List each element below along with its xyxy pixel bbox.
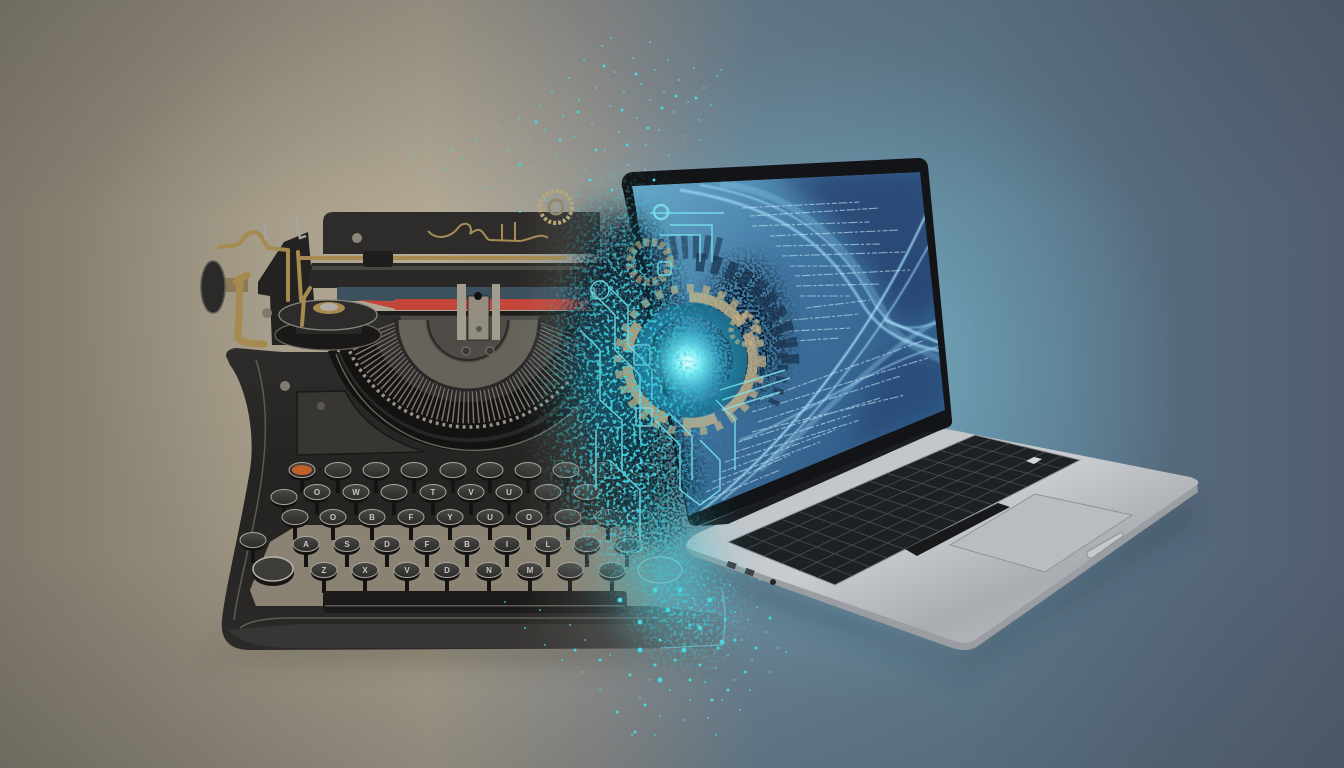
brass levers — [219, 232, 310, 344]
side panel — [297, 391, 425, 455]
laptop base top — [686, 429, 1198, 643]
key row 4: X — [362, 566, 368, 575]
laptop lid — [622, 158, 952, 526]
type bars — [372, 331, 564, 399]
keyboard — [728, 435, 1080, 585]
carriage frame — [258, 232, 314, 345]
key row 3: B — [464, 540, 470, 549]
hinge — [700, 431, 936, 526]
medium particles — [520, 66, 770, 732]
inner metal ring — [412, 320, 524, 376]
front notch — [1087, 533, 1123, 558]
key row 3: S — [344, 540, 350, 549]
outer dark data blocks — [650, 246, 790, 410]
key row 3: I — [506, 540, 508, 549]
laptop base side edge — [686, 482, 1198, 650]
key row 2: B — [369, 513, 375, 522]
circuit and gear core — [540, 191, 790, 540]
typewriter — [201, 212, 725, 650]
ornamental logo — [428, 222, 548, 241]
top plate — [323, 212, 600, 254]
space bar — [905, 503, 1010, 556]
key row 1: W — [352, 488, 360, 497]
core glow — [630, 304, 746, 420]
key row 2: O — [526, 513, 532, 522]
key row 3: L — [546, 540, 551, 549]
soft ground shadow — [210, 500, 1195, 670]
key row 4: Z — [322, 566, 327, 575]
key row 2: Y — [447, 513, 453, 522]
key row 0 — [289, 462, 616, 493]
flying particles — [412, 38, 786, 735]
type guide — [457, 284, 500, 340]
left knob — [201, 261, 248, 313]
dissolve dark speckle — [551, 206, 802, 562]
type bar tips — [347, 345, 590, 427]
circuit traces — [580, 205, 790, 540]
small particles — [412, 38, 786, 735]
ghost typewriter base — [622, 188, 725, 648]
space bar — [323, 591, 627, 613]
tan gear — [540, 191, 762, 432]
key row 4: V — [404, 566, 410, 575]
key row 3: D — [384, 540, 390, 549]
key row 1: V — [468, 488, 474, 497]
key row 3: F — [425, 540, 430, 549]
ink ribbon — [336, 287, 596, 315]
key row 1: O — [314, 488, 320, 497]
key row 3 — [240, 532, 640, 567]
type basket — [332, 316, 612, 450]
key row 2: O — [330, 513, 336, 522]
key row 4: N — [486, 566, 492, 575]
large particles — [620, 590, 722, 680]
dark dissolve haze — [575, 203, 680, 525]
key row 2: F — [409, 513, 414, 522]
code lines on screen — [702, 202, 928, 502]
spool — [275, 300, 381, 350]
wave lines on screen — [680, 184, 946, 512]
glow behind the core — [582, 310, 710, 630]
typewriter body — [222, 315, 725, 650]
laptop — [622, 158, 1198, 650]
frame highlights — [234, 360, 725, 628]
key row 1: T — [431, 488, 436, 497]
key row 1: U — [506, 488, 512, 497]
key row 4 — [252, 557, 625, 593]
key row 2: U — [487, 513, 493, 522]
platen — [309, 263, 620, 288]
gold rod — [297, 251, 567, 267]
keys — [240, 462, 640, 613]
laptop screen — [632, 165, 950, 516]
ports — [726, 561, 776, 585]
key row 4: D — [444, 566, 450, 575]
key row 1 — [270, 484, 638, 515]
trackpad — [950, 494, 1132, 572]
key row 3: A — [303, 540, 309, 549]
key row 4: M — [527, 566, 534, 575]
key row 2 — [282, 510, 621, 540]
keyboard well — [250, 525, 655, 606]
ghost keys in particles — [617, 463, 682, 583]
teal speckle dissolve — [526, 169, 753, 674]
